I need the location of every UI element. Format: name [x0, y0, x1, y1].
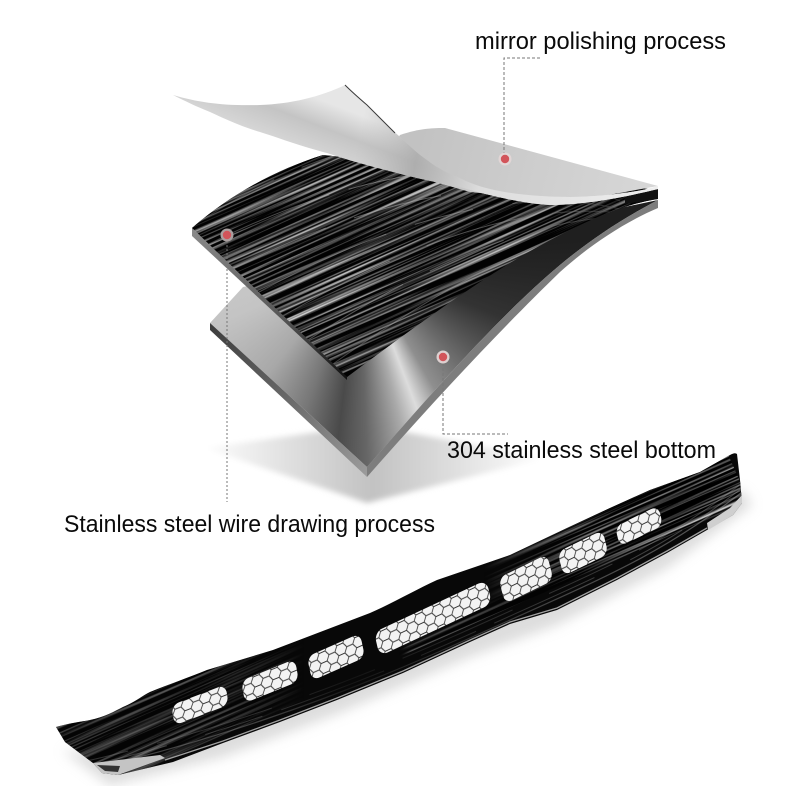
callout: Stainless steel wire drawing process: Stainless steel wire drawing process	[64, 511, 435, 538]
sheet left edge	[192, 228, 347, 380]
brushed streaks	[192, 155, 654, 377]
silver lower edge	[165, 528, 707, 760]
floor shadow	[205, 425, 545, 503]
callout: mirror polishing process	[475, 28, 726, 166]
vent 5	[499, 554, 553, 604]
vent 4: large centre	[374, 580, 492, 656]
layer: mirror sheet back	[395, 128, 658, 202]
layered material diagram	[174, 84, 658, 506]
flap fold edge	[345, 85, 395, 133]
callout: 304 stainless steel bottom: 304 stainless steel bottom	[447, 437, 716, 464]
layer: wire drawing black sheet	[192, 155, 658, 380]
vent 1	[171, 685, 229, 725]
vent 2	[241, 659, 299, 703]
right edge layers	[625, 189, 658, 204]
plate left edge	[210, 323, 367, 477]
callout: mirror polishing process: mirror polishing process	[475, 28, 726, 55]
callout: 304 stainless steel bottom	[436, 350, 716, 464]
vent 6	[558, 530, 608, 576]
callout: Stainless steel wire drawing process	[64, 228, 435, 538]
mesh vents	[171, 506, 663, 725]
brushed texture	[56, 456, 742, 775]
chrome end: right	[707, 495, 742, 530]
vent 7	[615, 506, 663, 546]
layer: 304 stainless steel bottom plate	[210, 200, 658, 477]
plate body	[56, 453, 742, 775]
plate shadow	[62, 490, 752, 786]
chrome end: left	[93, 755, 165, 775]
vent 3	[307, 633, 365, 681]
plate right edge	[367, 200, 658, 477]
layer: mirror polished peeling sheet	[173, 85, 658, 205]
product: brushed steel door sill plate	[51, 432, 752, 798]
